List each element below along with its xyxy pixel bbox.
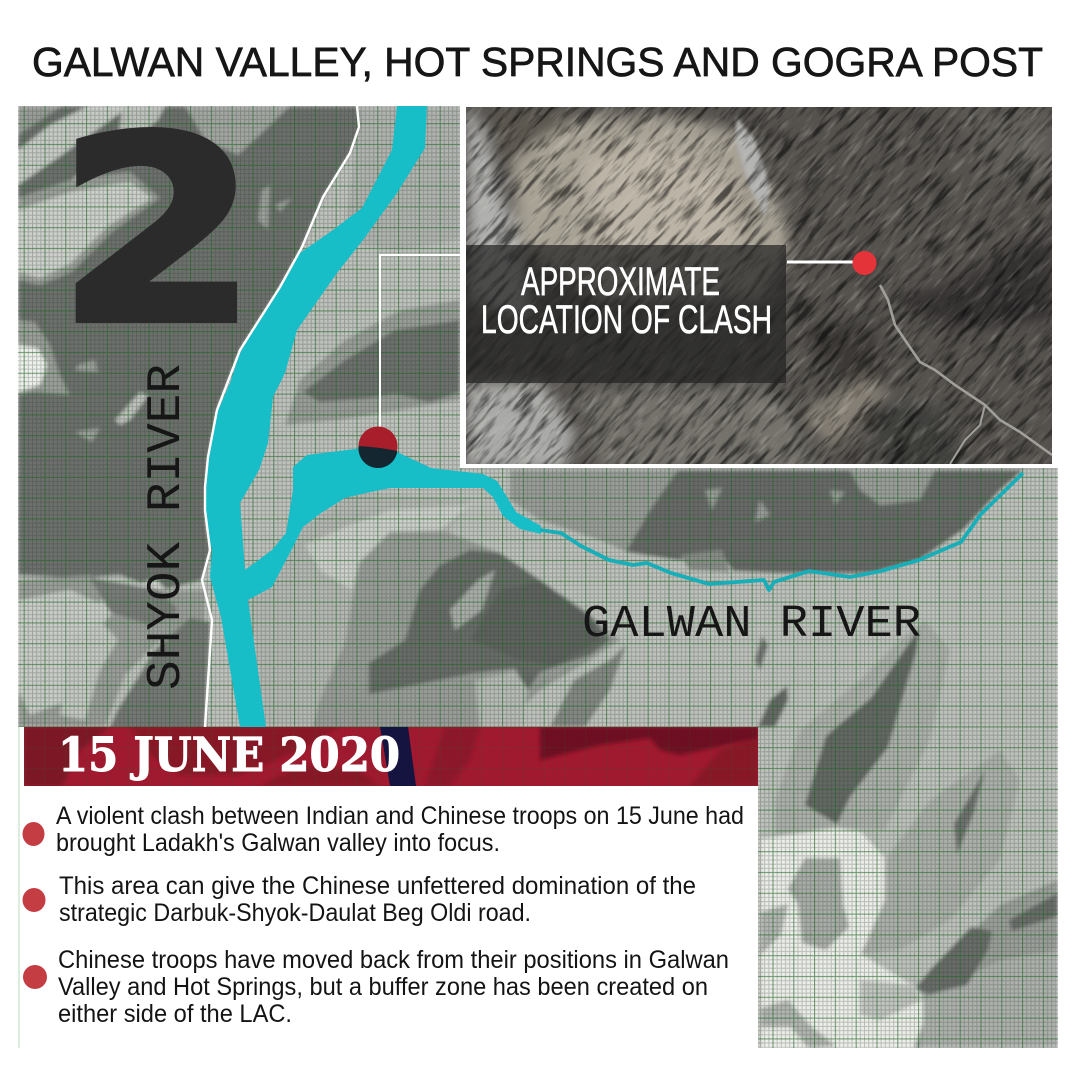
bullet 3 text: Valley and Hot Springs, but a buffer zone has been created on: [58, 973, 708, 1001]
panel: satellite inset: [460, 106, 1058, 468]
icon: shyok river: [205, 106, 541, 727]
bullet 2 text: This area can give the Chinese unfettered domination of the: [59, 872, 696, 900]
label: approximate location of clash: APPROXIMATE: [521, 260, 720, 304]
clash marker on map: [358, 426, 398, 468]
bullet 1 text: brought Ladakh's Galwan valley into focus.: [56, 829, 500, 857]
road: [880, 285, 1052, 455]
bullet 3 text: [58, 946, 729, 1028]
navy stripe: [380, 727, 416, 786]
pointer line: [787, 260, 864, 264]
bullet 2 text: strategic Darbuk-Shyok-Daulat Beg Oldi road.: [59, 899, 531, 927]
icon: galwan river channel: [540, 473, 1023, 590]
ridge texture: [466, 107, 1052, 464]
bullet 3: [23, 946, 729, 1028]
white boundary line: [202, 106, 359, 727]
panel: text background: [18, 727, 758, 1048]
satellite tonal zones: [466, 107, 1052, 470]
banner date text: 15 JUNE 2020: [58, 728, 400, 783]
bullet 1 text: [56, 802, 744, 857]
bullet 1 text: A violent clash between Indian and Chinese troops on 15 June had: [56, 802, 744, 830]
label band: [466, 245, 786, 383]
title: GALWAN VALLEY, HOT SPRINGS AND GOGRA POST: [32, 39, 1043, 85]
clash marker on satellite: [852, 251, 876, 275]
bullet 2 text: [59, 872, 696, 927]
label: approximate location of clash: LOCATION OF CLASH: [481, 298, 772, 342]
label: approximate location of clash: [481, 260, 772, 342]
bullet 3 text: either side of the LAC.: [58, 1000, 292, 1028]
number 2: 2: [56, 82, 259, 381]
label: galwan river: GALWAN RIVER: [582, 599, 921, 650]
bullet 2: [22, 872, 696, 927]
bullet 3 text: Chinese troops have moved back from their positions in Galwan: [58, 946, 729, 974]
bullet 1: [22, 802, 744, 857]
connector line: [380, 255, 460, 430]
banner: date: [24, 727, 758, 786]
label: shyok river: SHYOK RIVER: [140, 364, 194, 690]
